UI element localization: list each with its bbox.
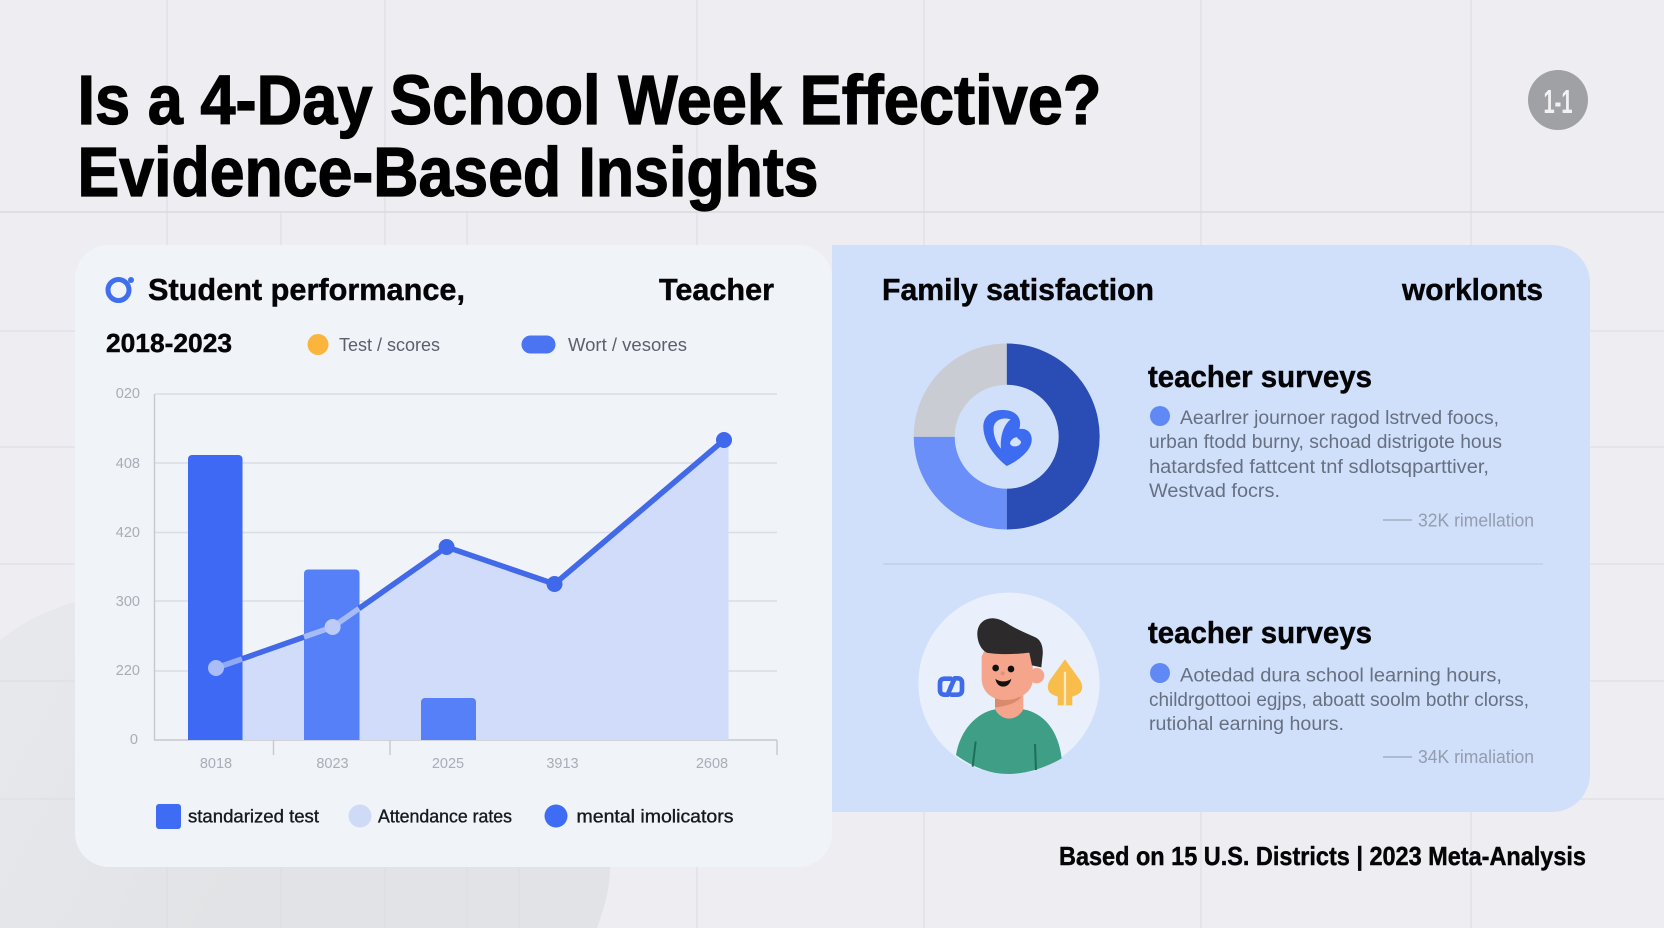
period label: 2018-2023: [106, 328, 232, 358]
section 2 heading: teacher surveys: [1148, 615, 1372, 650]
shirt: [956, 709, 1062, 774]
area: attendance: [216, 440, 728, 740]
y axis labels: [116, 386, 140, 748]
section 2 text: childrgottooi egjps, aboatt soolm bothr clorss,: [1149, 690, 1529, 711]
face: [982, 648, 1033, 700]
badge: 1-1: [1544, 83, 1572, 120]
top legend: wort vesores: Wort / vesores: [568, 335, 687, 355]
section 1 text: Westvad focrs.: [1149, 481, 1280, 502]
bottom legend: Attendance rates: [378, 806, 512, 826]
icon: yellow arrow: [1048, 659, 1082, 705]
bottom legend: [156, 804, 734, 829]
section 1 caption: 32K rimellation: [1418, 510, 1534, 530]
neck: [995, 692, 1023, 719]
section 1 text: [1149, 406, 1502, 502]
y axis labels: 300: [116, 594, 140, 610]
combo chart: [116, 386, 777, 772]
bottom legend: mental imolicators: [576, 806, 734, 826]
icon: ring: [108, 277, 134, 300]
section 1 heading: teacher surveys: [1148, 359, 1372, 394]
ear: [1029, 668, 1044, 683]
top legend: test scores: Test / scores: [339, 335, 440, 355]
y axis labels: 408: [116, 456, 140, 472]
x axis labels: 3913: [546, 756, 579, 772]
panel heading right: Teacher: [659, 272, 774, 307]
heading right: worklonts: [1401, 272, 1543, 307]
section 2 text: Aotedad dura school learning hours,: [1180, 666, 1502, 686]
title: Is a 4-Day School Week Effective?: [78, 61, 1102, 139]
section 1 text: Aearlrer journoer ragod lstrved foocs,: [1180, 408, 1499, 429]
icon: link: [940, 678, 962, 695]
bar 2: [304, 570, 360, 740]
badge: [1528, 70, 1588, 130]
hair: [977, 618, 1043, 667]
panel heading left: Student performance,: [148, 272, 465, 307]
bar 1: [188, 455, 242, 740]
title: Evidence-Based Insights: [78, 133, 818, 211]
donut chart: [914, 344, 1100, 530]
icon: heart logo: [983, 410, 1032, 466]
illustration: avatar: [918, 593, 1100, 774]
panel: student performance: [75, 245, 832, 867]
section 1 text: urban ftodd burny, schoad distrigote hous: [1149, 432, 1502, 453]
line: mental indicators: [208, 432, 732, 676]
x axis labels: [200, 756, 728, 772]
x axis labels: 8018: [200, 756, 232, 772]
y axis labels: 220: [116, 663, 140, 679]
eyes and smile: [992, 665, 1014, 687]
bottom legend: standarized test: [188, 806, 319, 826]
section 2 caption: 34K rimaliation: [1418, 747, 1534, 767]
x axis labels: 2025: [432, 756, 464, 772]
footer source note: Based on 15 U.S. Districts | 2023 Meta-Analysis: [1059, 841, 1586, 871]
section 1 text: hatardsfed fattcent tnf sdlotsqparttiver,: [1149, 457, 1489, 478]
x axis labels: 2608: [696, 756, 728, 772]
section 2 text: [1149, 663, 1529, 735]
x axis labels: 8023: [316, 756, 349, 772]
bar 3: [421, 698, 476, 740]
top legend: wort vesores: [522, 335, 687, 355]
heading left: Family satisfaction: [882, 272, 1154, 307]
y axis labels: 020: [116, 386, 140, 402]
title: [78, 61, 1102, 211]
y axis labels: 0: [130, 732, 138, 748]
panel: family satisfaction: [832, 245, 1590, 812]
y axis labels: 420: [116, 525, 140, 541]
section 2 text: rutiohal earning hours.: [1149, 714, 1344, 735]
